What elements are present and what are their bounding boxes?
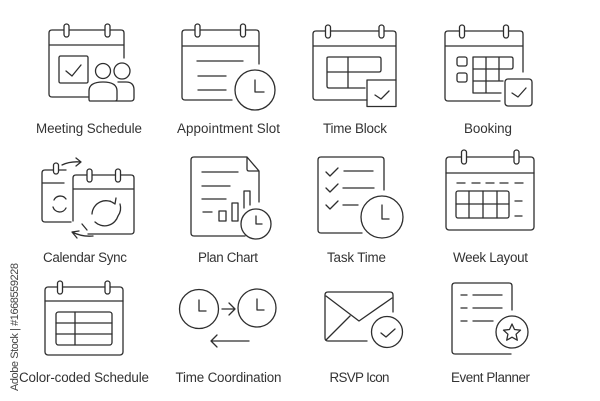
icon: calendar with clock [182, 24, 275, 110]
label: color-coded schedule: Color-coded Schedule [19, 370, 149, 385]
icon: calendar with booking grid [445, 25, 532, 106]
icon: wide calendar with week grid [446, 150, 534, 230]
icon: envelope with check [325, 292, 402, 348]
panel: meeting schedule [36, 24, 142, 136]
panel: time block [313, 25, 396, 136]
icon: checklist with clock [318, 157, 403, 238]
label: task time: Task Time [327, 250, 386, 265]
label: week layout: Week Layout [453, 250, 528, 265]
panel: appointment slot [177, 24, 280, 136]
panel: task time [318, 157, 403, 265]
label: calendar sync: Calendar Sync [43, 250, 127, 265]
panel: event planner [451, 283, 531, 385]
label: appointment slot: Appointment Slot [177, 121, 280, 136]
panel: time coordination [176, 289, 282, 385]
icon: calendar with block grid and check [313, 25, 396, 106]
icon: two clocks with arrows [180, 289, 276, 347]
panel: week layout [446, 150, 534, 265]
icon: document with star badge [452, 283, 528, 354]
icon: calendar with table [45, 281, 123, 355]
panel: plan chart [191, 157, 271, 265]
stock id side text: Adobe Stock | #1668559228 [9, 263, 21, 391]
icon: calendar with people [49, 24, 134, 101]
label: time block: Time Block [323, 121, 387, 136]
panel: color-coded schedule [19, 281, 149, 385]
panel: calendar sync [42, 158, 134, 265]
label: plan chart: Plan Chart [198, 250, 258, 265]
label: event planner: Event Planner [451, 370, 531, 385]
label: meeting schedule: Meeting Schedule [36, 121, 142, 136]
label: time coordination: Time Coordination [176, 370, 282, 385]
label: rsvp icon: RSVP Icon [330, 370, 390, 385]
panel: rsvp icon [325, 292, 402, 385]
icon: two calendars with sync arrows [42, 158, 134, 238]
label: booking: Booking [464, 121, 512, 136]
panel: booking [445, 25, 532, 136]
icon: document with bar chart and clock [191, 157, 271, 239]
